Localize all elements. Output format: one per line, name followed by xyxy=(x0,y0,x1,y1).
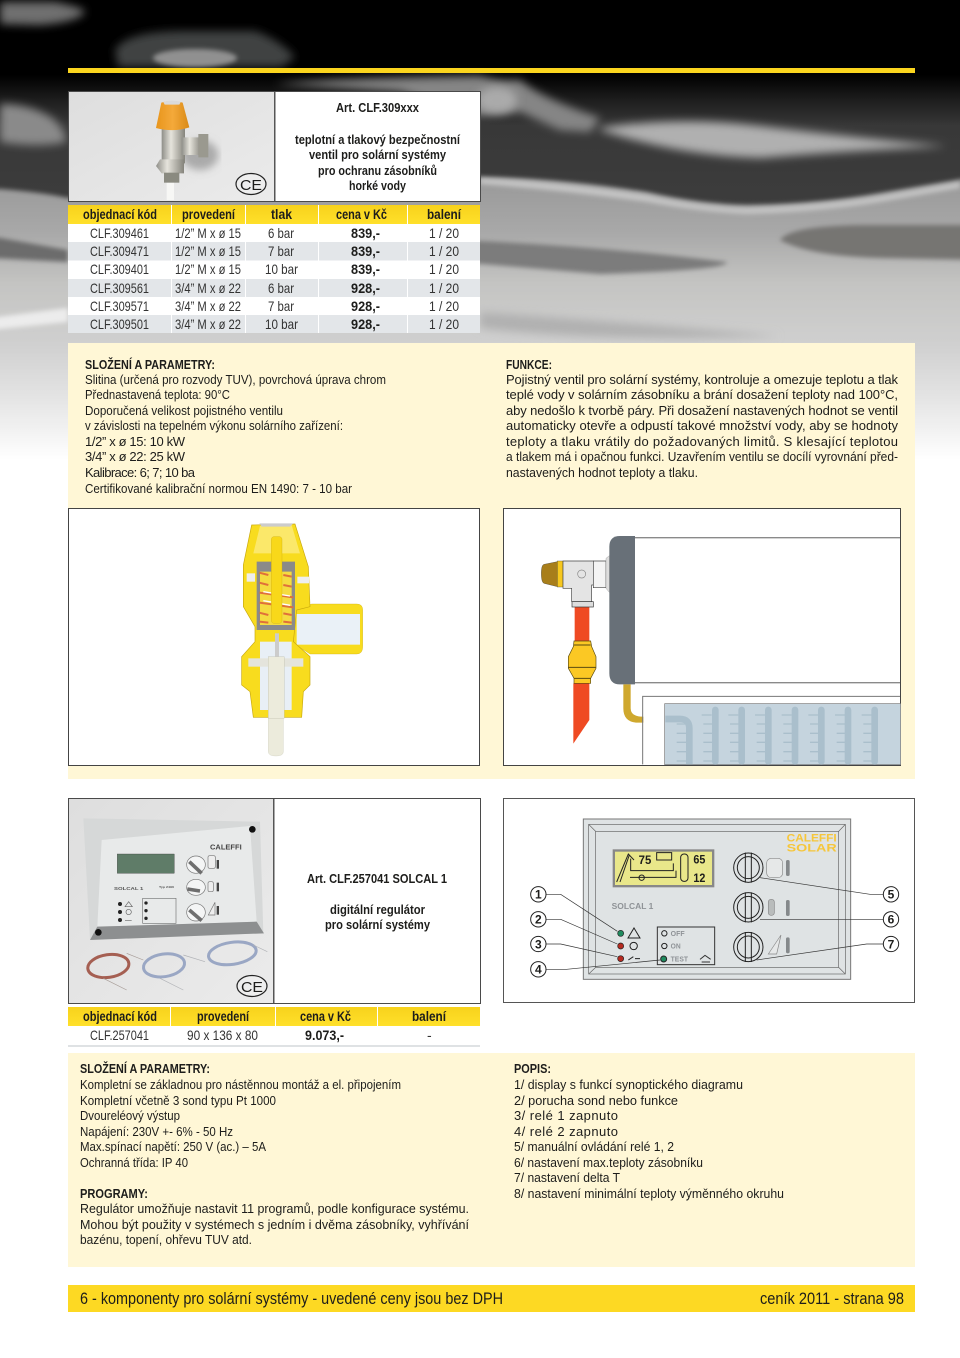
text block: function: Pojistný ventil pro solární systémy, kontroluje a omezuje teplotu a tlak xyxy=(506,372,898,387)
text block: composition and programs: Napájení: 230V +- 6% - 50 Hz xyxy=(80,1124,233,1139)
text block: composition and parameters: v závislosti na tepelném výkonu solárního zařízení: xyxy=(85,418,343,433)
background: dark smoke photo xyxy=(0,0,960,470)
table: product 1 prices: 1 / 20 xyxy=(429,261,459,277)
text block: description legend: 5/ manuální ovládání relé 1, 2 xyxy=(514,1139,674,1154)
CE mark: CE xyxy=(240,177,262,194)
footer bar xyxy=(68,1285,915,1312)
product 2 title: pro solární systémy xyxy=(325,917,431,932)
table: product 2 price: objednací kód xyxy=(83,1008,157,1024)
diagram: valve cross-section xyxy=(68,508,480,766)
diagram: controller front panel: OFF xyxy=(671,929,685,938)
text block: description legend: 2/ porucha sond nebo funkce xyxy=(514,1093,678,1108)
product 2 title xyxy=(307,871,447,932)
table: product 2 price xyxy=(68,1007,480,1047)
text block: function xyxy=(506,357,898,480)
text block: function: teploty a tlaku vrátily do požadovaných limitů. S klesající teplotou xyxy=(506,434,898,449)
text block: composition and programs xyxy=(80,1061,469,1247)
text block: composition and parameters xyxy=(85,357,386,496)
text block: composition and programs: Regulátor umožňuje nastavit 11 programů, podle konfigurace systému. xyxy=(80,1201,469,1216)
footer bar: 6 - komponenty pro solární systémy - uvedené ceny jsou bez DPH xyxy=(80,1289,503,1308)
text block: composition and programs: Max.spínací napětí: 250 V (ac.) – 5A xyxy=(80,1139,266,1154)
text block: description legend: 3/ relé 1 zapnuto xyxy=(514,1108,618,1123)
text block: function: automaticky otevře a odpustí takové množství vody, aby se hodnoty xyxy=(506,418,898,433)
table: product 1 prices: 3/4” M x ø 22 xyxy=(175,316,241,332)
product 1 title: pro ochranu zásobníků xyxy=(318,163,437,178)
footer bar: ceník 2011 - strana 98 xyxy=(760,1289,904,1308)
table: product 1 prices: 7 bar xyxy=(268,243,294,259)
table: product 1 prices: 928,- xyxy=(351,280,380,296)
table: product 1 prices: 3/4” M x ø 22 xyxy=(175,280,241,296)
panel: product 1 header xyxy=(68,92,480,202)
table: product 1 prices: 10 bar xyxy=(265,261,298,277)
table: product 1 prices: 6 bar xyxy=(268,280,294,296)
text block: composition and parameters: 1/2” x ø 15: 10 kW xyxy=(85,434,186,449)
table: product 2 price: 90 x 136 x 80 xyxy=(187,1027,258,1043)
text block: composition and parameters: Přednastavená teplota: 90°C xyxy=(85,387,230,402)
table: product 2 price: balení xyxy=(412,1008,447,1024)
text block: composition and programs: SLOŽENÍ A PARAMETRY: xyxy=(80,1061,210,1076)
product photo: SOLCAL controller and sensors xyxy=(69,799,274,1003)
text block: function: FUNKCE: xyxy=(506,357,552,372)
text block: composition and programs: Dvoureléový výstup xyxy=(80,1108,180,1123)
number callouts: 7 xyxy=(888,937,895,951)
product 1 title: Art. CLF.309xxx xyxy=(336,100,420,115)
table: product 1 prices: 1 / 20 xyxy=(429,225,459,241)
product 1 title: horké vody xyxy=(349,178,407,193)
text block: composition and parameters: Doporučená velikost pojistného ventilu xyxy=(85,403,283,418)
product 1 title xyxy=(295,100,460,193)
text block: function: teplé vody v solárním zásobníku a brání dosažení teploty nad 100°C, xyxy=(506,387,898,402)
diagram: controller front panel: CALEFFI xyxy=(787,833,837,845)
number callouts: 1 xyxy=(535,888,542,902)
CE mark xyxy=(236,174,266,194)
table: product 1 prices: 3/4” M x ø 22 xyxy=(175,298,241,314)
table: product 1 prices: 928,- xyxy=(351,316,380,332)
table: product 1 prices: 1/2” M x ø 15 xyxy=(175,243,241,259)
text block: function: aby nedošlo k tvorbě páry. Při dosažení nastavených hodnot se ventil xyxy=(506,403,898,418)
text block: description legend: 1/ display s funkcí synoptického diagramu xyxy=(514,1077,743,1092)
text block: description legend: 4/ relé 2 zapnuto xyxy=(514,1124,618,1139)
number callouts: 6 xyxy=(888,913,895,927)
table: product 1 prices: 1 / 20 xyxy=(429,298,459,314)
diagram: controller front panel: 12 xyxy=(693,871,706,885)
text block: composition and parameters: SLOŽENÍ A PARAMETRY: xyxy=(85,357,215,372)
panel: product 2 header xyxy=(68,798,480,1004)
text block: composition and parameters: Certifikované kalibrační normou EN 1490: 7 - 10 bar xyxy=(85,481,353,496)
table: product 1 prices: cena v Kč xyxy=(336,206,387,222)
table: product 1 prices: 839,- xyxy=(351,243,380,259)
table: product 1 prices: 7 bar xyxy=(268,298,294,314)
CE mark: CE xyxy=(241,979,263,996)
table: product 1 prices: CLF.309571 xyxy=(90,298,149,314)
diagram: controller front panel: 65 xyxy=(693,853,706,867)
table: product 1 prices: CLF.309461 xyxy=(90,225,149,241)
table: product 1 prices: 1 / 20 xyxy=(429,316,459,332)
table: product 1 prices: CLF.309501 xyxy=(90,316,149,332)
table: product 1 prices: objednací kód xyxy=(83,206,157,222)
table: product 1 prices: 1/2” M x ø 15 xyxy=(175,225,241,241)
table: product 2 price: cena v Kč xyxy=(300,1008,351,1024)
text block: composition and programs: bazénu, topení, ohřevu TUV atd. xyxy=(80,1232,252,1247)
number callouts: 4 xyxy=(535,963,542,977)
diagram: controller front panel: 75 xyxy=(639,853,652,867)
table: product 1 prices: 1 / 20 xyxy=(429,243,459,259)
number callouts xyxy=(531,887,899,977)
table: product 1 prices xyxy=(68,205,480,333)
lower light water area xyxy=(0,176,960,470)
top yellow rule xyxy=(68,68,915,73)
product 1 title: ventil pro solární systémy xyxy=(309,147,447,162)
number callouts: 2 xyxy=(535,913,542,927)
table: product 1 prices: 928,- xyxy=(351,298,380,314)
table: product 1 prices: 10 bar xyxy=(265,316,298,332)
number callouts: 5 xyxy=(888,888,895,902)
table: product 2 price: provedení xyxy=(197,1008,250,1024)
table: product 1 prices: 6 bar xyxy=(268,225,294,241)
product photo: SOLCAL controller and sensors: SOLCAL 1 xyxy=(114,886,144,892)
table: product 1 prices: provedení xyxy=(182,206,236,222)
product 2 title: digitální regulátor xyxy=(330,902,425,917)
table: product 1 prices: CLF.309561 xyxy=(90,280,149,296)
text block: description legend: 6/ nastavení max.teploty zásobníku xyxy=(514,1155,703,1170)
table: product 2 price: 9.073,- xyxy=(305,1027,344,1043)
table: product 1 prices: balení xyxy=(427,206,462,222)
table: product 1 prices: CLF.309401 xyxy=(90,261,149,277)
table: product 1 prices: CLF.309471 xyxy=(90,243,149,259)
CE mark xyxy=(237,976,267,996)
product photo: SOLCAL controller and sensors: CALEFFI xyxy=(210,842,242,851)
diagram: controller front panel: ON xyxy=(671,942,681,951)
product photo: safety valve xyxy=(69,92,276,201)
panel: product 2 description xyxy=(68,1053,915,1267)
table: product 1 prices: 839,- xyxy=(351,261,380,277)
text block: composition and parameters: Kalibrace: 6; 7; 10 ba xyxy=(85,465,196,480)
text block: description legend: POPIS: xyxy=(514,1061,551,1076)
text block: composition and programs: Kompletní se základnou pro nástěnnou montáž a el. připojením xyxy=(80,1077,401,1092)
text block: composition and programs: PROGRAMY: xyxy=(80,1186,148,1201)
text block: composition and parameters: 3/4” x ø 22: 25 kW xyxy=(85,449,186,464)
table: product 2 price: CLF.257041 xyxy=(90,1027,149,1043)
diagram: controller front panel xyxy=(504,798,914,1002)
text block: description legend: 8/ nastavení minimální teploty výměnného okruhu xyxy=(514,1186,784,1201)
product photo: SOLCAL controller and sensors: Typ 2490 xyxy=(159,885,174,889)
text block: description legend xyxy=(514,1061,784,1201)
diagram: controller front panel: SOLCAL 1 xyxy=(612,901,654,911)
text block: composition and programs: Mohou být použity v systémech s jedním i dvěma zásobníky, vyhřívání xyxy=(80,1217,469,1232)
product 1 title: teplotní a tlakový bezpečnostní xyxy=(295,132,460,147)
text block: description legend: 7/ nastavení delta T xyxy=(514,1170,620,1185)
diagram: controller front panel: TEST xyxy=(671,955,688,964)
diagram: controller front panel: SOLAR xyxy=(787,843,837,855)
number callouts: 3 xyxy=(535,937,542,951)
text block: composition and parameters: Slitina (určená pro rozvody TUV), povrchová úprava chrom xyxy=(85,372,386,387)
product 2 title: Art. CLF.257041 SOLCAL 1 xyxy=(307,871,447,886)
text block: function: a tlakem má i opačnou funkci. Uzavřením ventilu se docílí vyrovnání před- xyxy=(506,449,898,464)
table: product 1 prices: 1 / 20 xyxy=(429,280,459,296)
text block: composition and programs: Ochranná třída: IP 40 xyxy=(80,1155,188,1170)
text block: function: nastavených hodnot teploty a tlaku. xyxy=(506,465,698,480)
table: product 1 prices: 839,- xyxy=(351,225,380,241)
table: product 1 prices: tlak xyxy=(271,206,292,222)
panel: product 1 description xyxy=(68,343,915,779)
text block: composition and programs: Kompletní včetně 3 sond typu Pt 1000 xyxy=(80,1093,276,1108)
diagram: valve on solar tank xyxy=(504,508,901,766)
table: product 2 price: - xyxy=(427,1027,432,1043)
table: product 1 prices: 1/2” M x ø 15 xyxy=(175,261,241,277)
